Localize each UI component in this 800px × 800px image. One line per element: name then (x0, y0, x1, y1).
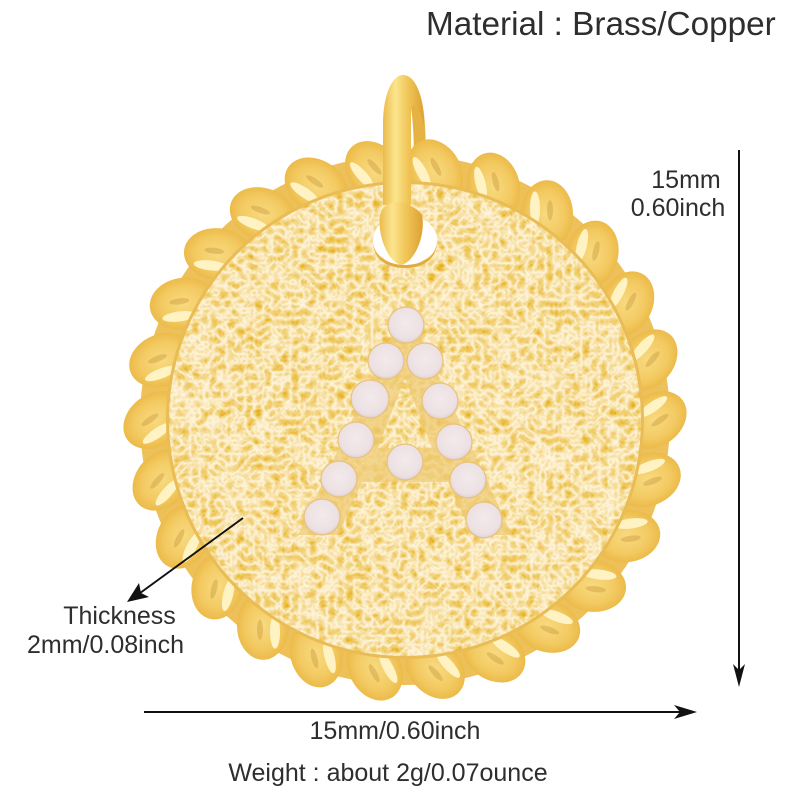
title: material: Material : Brass/Copper (426, 6, 776, 43)
rope border (112, 129, 698, 711)
height label: 0.60inch (631, 194, 725, 222)
letter A setting (298, 305, 512, 538)
height label: 15mm (651, 166, 721, 194)
thickness label: Thickness (63, 602, 176, 630)
thickness label (27, 602, 184, 659)
weight note: Weight : about 2g/0.07ounce (228, 759, 548, 787)
width label: 15mm/0.60inch (310, 717, 480, 745)
pendant hole (373, 215, 437, 265)
jump ring front (380, 75, 424, 265)
height dimension arrow (733, 150, 745, 687)
thickness label: 2mm/0.08inch (27, 631, 184, 659)
thickness pointer arrow (127, 518, 243, 602)
hole rim shadow (373, 240, 437, 268)
rhinestones (304, 307, 502, 538)
height label (631, 166, 725, 222)
inner edge shadow (166, 181, 644, 659)
jump ring back (403, 85, 420, 215)
pendant (112, 75, 698, 711)
width dimension arrow (144, 705, 697, 719)
textured disc face (169, 184, 641, 656)
